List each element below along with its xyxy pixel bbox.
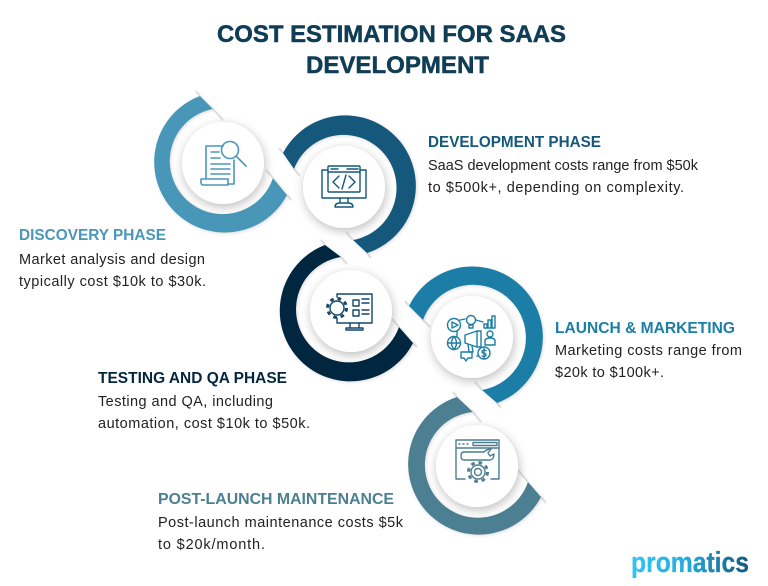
ring: testing and QA — [280, 240, 417, 381]
icon: code monitor — [322, 166, 366, 207]
text: testing and QA phase: Testing and QA, including — [98, 394, 273, 410]
ring: discovery — [154, 91, 291, 233]
text: post-launch maintenance: to $20k/month. — [158, 537, 265, 553]
text: discovery phase: Market analysis and design — [19, 252, 205, 268]
text: post-launch maintenance — [158, 491, 404, 553]
ring: development — [279, 115, 416, 258]
text: launch and marketing: LAUNCH & MARKETING — [555, 320, 735, 337]
text: development phase — [428, 134, 699, 196]
text: development phase: to $500k+, depending on complexity. — [428, 180, 684, 196]
text: launch and marketing: Marketing costs range from — [555, 343, 742, 359]
text: post-launch maintenance: POST-LAUNCH MAINTENANCE — [158, 491, 394, 508]
text: discovery phase — [19, 227, 206, 290]
text: launch and marketing — [555, 320, 742, 381]
icon: testing monitor and gear — [328, 294, 372, 330]
title: DEVELOPMENT — [306, 52, 489, 79]
text: testing and QA phase — [98, 370, 310, 432]
icon: document with magnifier — [201, 142, 246, 185]
text: discovery phase: typically cost $10k to $30k. — [19, 274, 206, 290]
text: testing and QA phase: TESTING AND QA PHASE — [98, 370, 287, 387]
text: launch and marketing: $20k to $100k+. — [555, 365, 664, 381]
text: development phase: SaaS development costs range from $50k — [428, 158, 699, 174]
ring: launch and marketing — [405, 266, 543, 408]
logo: promatics: promatics — [631, 547, 749, 579]
text: development phase: DEVELOPMENT PHASE — [428, 134, 601, 151]
title: COST ESTIMATION FOR SAAS — [217, 21, 566, 48]
ring: post-launch maintenance — [408, 392, 546, 535]
title — [217, 21, 566, 79]
text: post-launch maintenance: Post-launch maintenance costs $5k — [158, 515, 404, 531]
text: testing and QA phase: automation, cost $10k to $50k. — [98, 416, 310, 432]
text: discovery phase: DISCOVERY PHASE — [19, 227, 166, 244]
icon: marketing cluster — [448, 316, 495, 361]
icon: window with wrench and gear — [456, 440, 499, 482]
